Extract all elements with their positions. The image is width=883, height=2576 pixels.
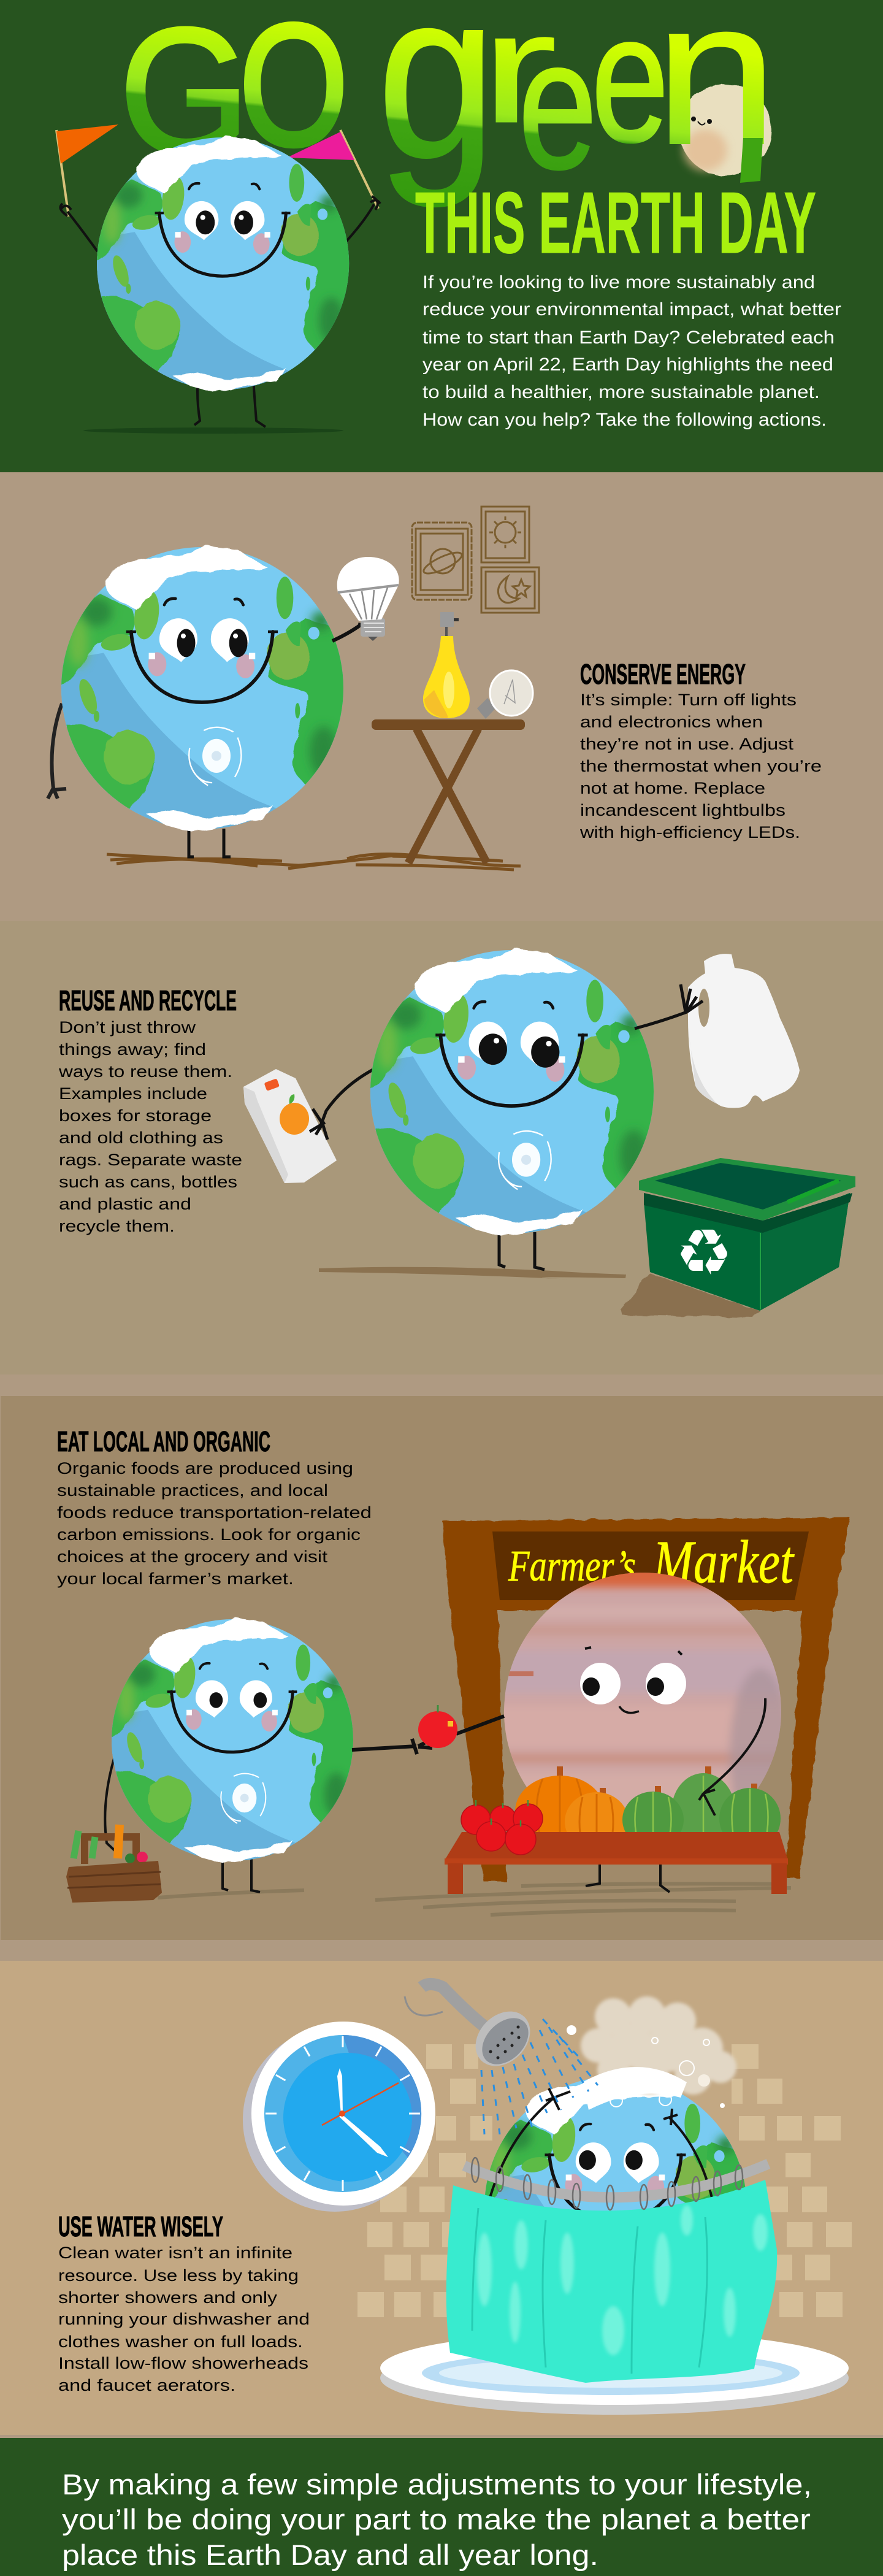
- body text: conserve energy: not at home. Replace: [580, 779, 765, 797]
- character: earth in shower: [481, 2075, 750, 2342]
- icon: wall clock: [243, 2022, 435, 2212]
- market stall: [442, 1517, 850, 1882]
- body text: reuse and recycle: boxes for storage: [59, 1106, 212, 1125]
- heading: reuse and recycle: REUSE AND RECYCLE: [59, 984, 237, 1016]
- body text: reuse and recycle: things away; find: [59, 1040, 206, 1059]
- melons: [622, 1766, 781, 1849]
- body text: conserve energy: It’s simple: Turn off lights: [580, 691, 797, 709]
- icon: shower head: [405, 1984, 541, 2077]
- produce table: [445, 1832, 788, 1894]
- body text: conserve energy: [579, 691, 822, 841]
- body text: reuse and recycle: [58, 1018, 242, 1235]
- ground shadow: [83, 427, 343, 434]
- ground shadow: [319, 1267, 626, 1279]
- sign: farmer's market: [508, 1528, 795, 1596]
- body text: eat local and organic: your local farmer’s market.: [57, 1570, 294, 1588]
- body text: reuse and recycle: and plastic and: [59, 1195, 191, 1213]
- character: earth holding LED bulb: [48, 546, 372, 857]
- picture frames: [412, 507, 539, 613]
- body text: reuse and recycle: ways to reuse them.: [58, 1062, 232, 1081]
- jupiter arm: [699, 1698, 765, 1815]
- icon: smiling beige planet: [679, 84, 771, 176]
- icon: vegetable basket: [66, 1825, 162, 1903]
- panel: footer: [0, 2438, 883, 2576]
- heading: conserve energy: CONSERVE ENERGY: [580, 658, 746, 690]
- body text: use water wisely: and faucet aerators.: [58, 2376, 235, 2394]
- icon: incandescent bulb: [477, 670, 533, 719]
- body text: conserve energy: the thermostat when you’re: [580, 757, 822, 775]
- soap foam: [567, 1996, 736, 2110]
- closing message: [62, 2468, 812, 2571]
- character: jupiter shopkeeper: [456, 1558, 797, 1892]
- title: Go green: [120, 0, 778, 209]
- closing message: By making a few simple adjustments to your lifestyle,: [62, 2468, 812, 2501]
- water drops: [481, 2019, 598, 2134]
- intro text: time to start than Earth Day? Celebrated each: [422, 328, 835, 348]
- panel: header: [0, 0, 883, 472]
- body text: conserve energy: with high-efficiency LEDs.: [579, 823, 800, 841]
- icon: plastic jug: [635, 954, 800, 1108]
- body text: reuse and recycle: Examples include: [59, 1084, 207, 1103]
- tomatoes: [461, 1800, 543, 1855]
- body text: eat local and organic: [57, 1459, 372, 1588]
- shower curtain: [446, 2180, 777, 2383]
- title: Go green: e: [518, 1, 597, 207]
- character: earth with tomato and basket: [105, 1618, 457, 1892]
- icon: tomato: [418, 1705, 457, 1748]
- curtain rod and rings: [464, 2158, 768, 2210]
- ground shading: [158, 1884, 791, 1915]
- intro text: reduce your environmental impact, what better: [422, 299, 841, 320]
- icon: LED bulb: [337, 557, 399, 641]
- body text: use water wisely: running your dishwasher and: [58, 2310, 310, 2328]
- intro text: to build a healthier, more sustainable planet.: [422, 382, 820, 402]
- body text: reuse and recycle: Don’t just throw: [59, 1018, 196, 1037]
- icon: recycling bin: [621, 1158, 855, 1317]
- intro text: If you’re looking to live more sustainably and: [422, 272, 815, 293]
- heading: use water wisely: USE WATER WISELY: [58, 2210, 223, 2242]
- panel: reuse and recycle: [0, 921, 883, 1374]
- body text: use water wisely: clothes washer on full loads.: [58, 2333, 303, 2351]
- sign: farmer's market: Market: [652, 1528, 795, 1596]
- ground scribble: [107, 854, 521, 870]
- body text: reuse and recycle: such as cans, bottles: [59, 1173, 237, 1191]
- body text: eat local and organic: choices at the grocery and visit: [57, 1547, 328, 1566]
- character: earth with flags: [56, 125, 380, 427]
- body text: conserve energy: they’re not in use. Adjust: [580, 735, 794, 753]
- body text: conserve energy: and electronics when: [580, 713, 763, 731]
- body text: use water wisely: [58, 2244, 310, 2394]
- closing message: place this Earth Day and all year long.: [62, 2539, 598, 2571]
- icon: juice carton: [243, 1069, 337, 1183]
- body text: eat local and organic: Organic foods are produced using: [57, 1459, 353, 1478]
- body text: eat local and organic: sustainable practices, and local: [57, 1481, 328, 1500]
- body text: reuse and recycle: recycle them.: [59, 1217, 175, 1235]
- body text: use water wisely: Clean water isn’t an infinite: [58, 2244, 292, 2262]
- character: earth holding items: [310, 949, 657, 1270]
- body text: reuse and recycle: rags. Separate waste: [59, 1151, 242, 1169]
- body text: use water wisely: shorter showers and only: [58, 2288, 278, 2307]
- body text: eat local and organic: foods reduce transportation-related: [57, 1503, 372, 1522]
- body text: use water wisely: resource. Use less by taking: [58, 2266, 299, 2285]
- panel: use water wisely: [0, 1961, 883, 2435]
- body text: reuse and recycle: and old clothing as: [59, 1129, 223, 1147]
- side table: [372, 719, 525, 863]
- shower tray: [380, 2331, 849, 2415]
- closing message: you’ll be doing your part to make the planet a better: [62, 2503, 811, 2536]
- body text: use water wisely: Install low-flow showerheads: [58, 2354, 308, 2372]
- heading: eat local and organic: EAT LOCAL AND ORGANIC: [57, 1425, 270, 1457]
- intro text: How can you help? Take the following actions.: [422, 410, 827, 430]
- intro text: year on April 22, Earth Day highlights the need: [422, 355, 833, 375]
- icon: recycling symbol: ♻: [675, 1215, 733, 1290]
- panel: conserve energy: [0, 472, 883, 921]
- pumpkins: [515, 1766, 629, 1851]
- body text: conserve energy: incandescent lightbulbs: [580, 801, 786, 819]
- panel: eat local and organic: [1, 1396, 883, 1940]
- icon: yellow vase lamp: [423, 612, 470, 718]
- intro text: [422, 272, 841, 430]
- body text: eat local and organic: carbon emissions. Look for organic: [57, 1525, 361, 1544]
- sign: farmer's market: Farmer’s: [508, 1541, 636, 1590]
- wall tiles: [357, 2044, 852, 2317]
